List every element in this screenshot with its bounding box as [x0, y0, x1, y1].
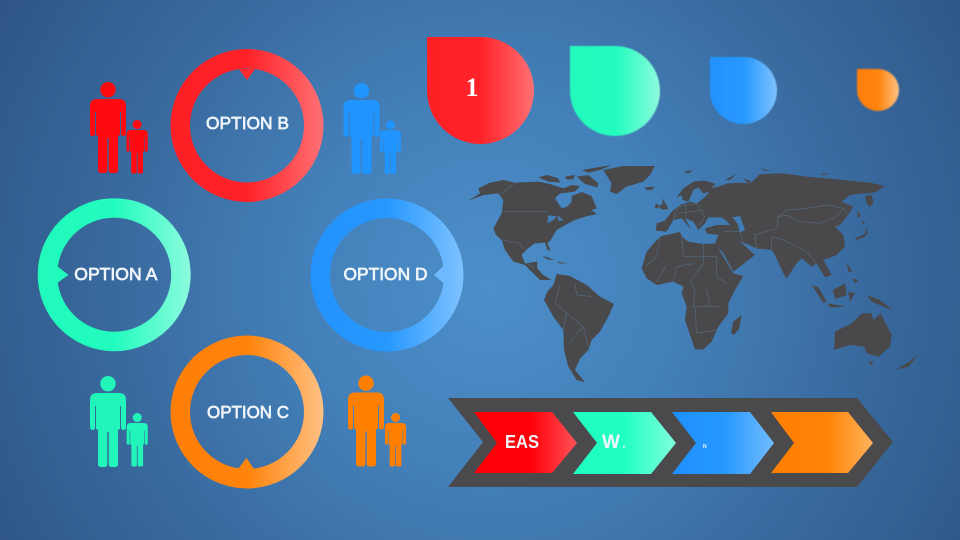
chevron: teal [573, 412, 676, 474]
label: small E: E [623, 444, 626, 449]
icon: teal adult and child [90, 376, 148, 467]
icon: blue adult and child [344, 83, 401, 174]
label: option B: OPTION B [206, 113, 289, 133]
drop: orange [857, 69, 899, 111]
drop: blue [710, 57, 777, 124]
ring: option C [170, 336, 324, 488]
icon: orange adult and child [348, 376, 406, 467]
drop: red with number 1 [427, 37, 534, 144]
chevron: red [474, 412, 577, 473]
label: W: W [602, 432, 620, 453]
ring: option A [38, 198, 191, 351]
label: EAS: EAS [505, 432, 539, 452]
chevron process bar [448, 398, 893, 487]
north america and greenland [468, 165, 655, 280]
eurasia [645, 168, 885, 278]
chevron: blue [672, 412, 774, 474]
label: option A: OPTION A [74, 264, 158, 284]
number 1: 1 [466, 73, 478, 102]
world map [468, 165, 918, 382]
south america, africa and islands [544, 232, 918, 382]
label: small N: N [703, 444, 707, 450]
chevron: orange [771, 412, 873, 473]
dark chevron backing [448, 398, 893, 487]
drop: teal [570, 46, 660, 136]
ring: option B [170, 49, 324, 202]
icon: red adult and child [90, 82, 148, 174]
label: option C: OPTION C [207, 402, 289, 422]
ring: option D [310, 199, 464, 352]
label: option D: OPTION D [344, 264, 428, 284]
